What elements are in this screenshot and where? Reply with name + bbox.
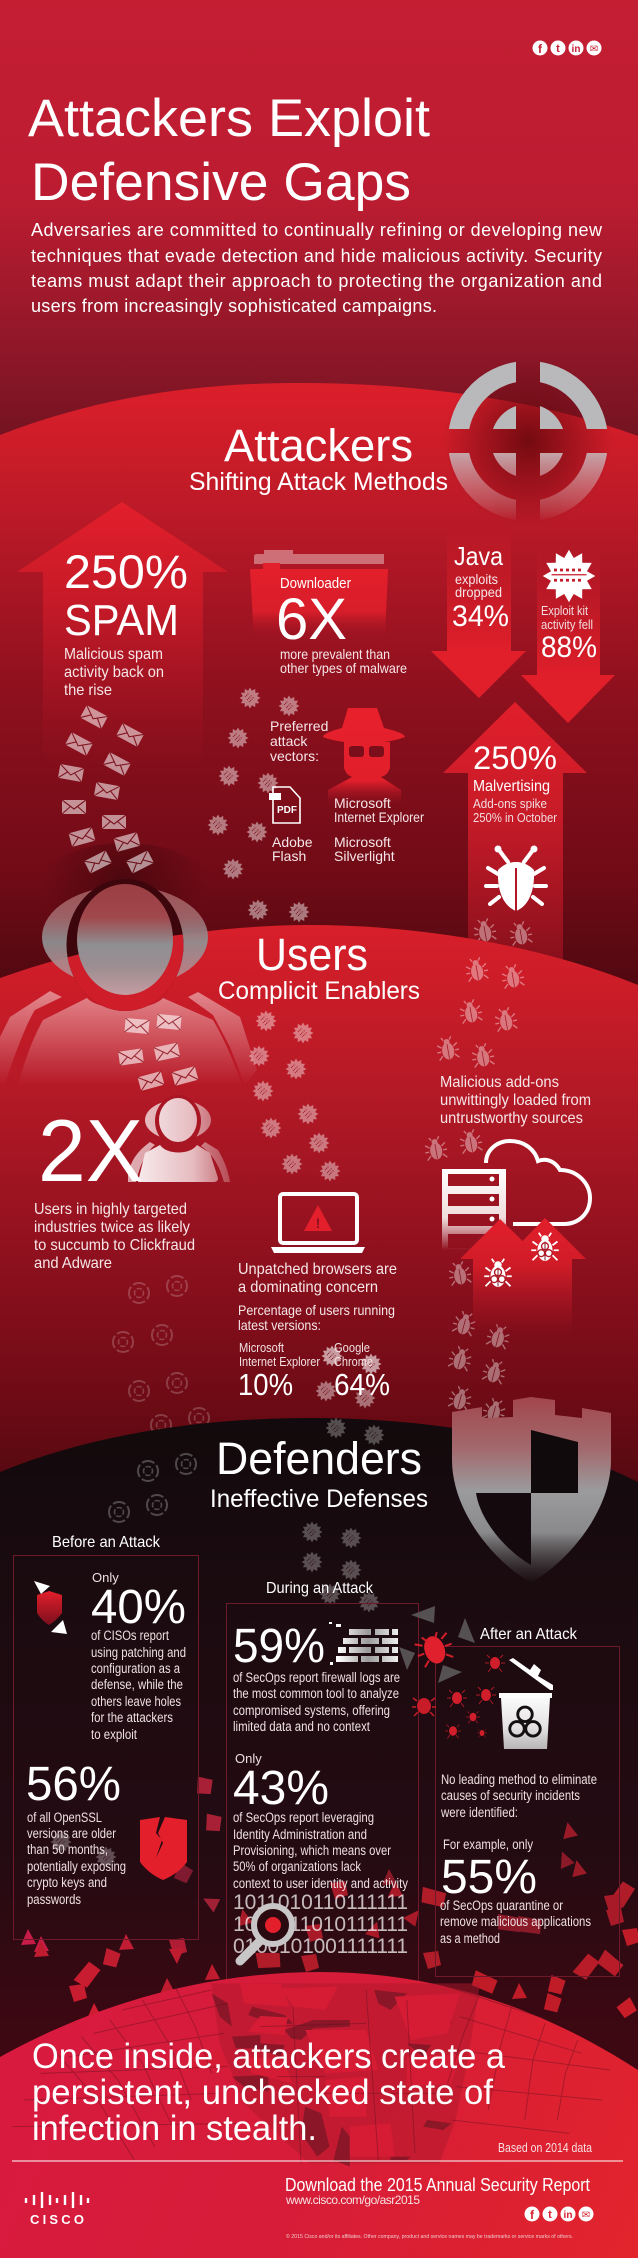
arrow: malvertising up <box>443 702 587 990</box>
stat: 40 percent: 40% <box>91 1581 186 1634</box>
intro paragraph: users from increasingly sophisticated campaigns. <box>31 296 437 316</box>
panel: after an attack <box>436 1626 620 1976</box>
spam stat: the rise <box>64 682 112 699</box>
title <box>28 89 430 212</box>
stat: 56 percent: versions are older <box>27 1826 116 1841</box>
java stat <box>452 541 509 633</box>
stat: 40 percent: using patching and <box>91 1645 186 1660</box>
download link <box>285 2175 590 2207</box>
stat: 59 percent: limited data and no context <box>233 1719 370 1734</box>
social icons top: f <box>538 42 543 56</box>
after attack text: causes of security incidents <box>441 1788 580 1803</box>
panel: bottom cracked dome <box>0 1972 638 2258</box>
vector names: Adobe <box>272 834 313 850</box>
stat: 43 percent: 50% of organizations lack <box>233 1859 361 1874</box>
exploit kit stat <box>541 603 597 664</box>
icon: spy <box>323 708 405 805</box>
icon: red bug with grey shards <box>399 1606 475 1716</box>
icon: cracked shield <box>140 1817 187 1880</box>
stat: 55 percent: as a method <box>440 1931 500 1946</box>
binary text: 1011010110111111 <box>233 1891 408 1914</box>
browsers text <box>238 1261 397 1402</box>
preferred attack vectors label: vectors: <box>270 748 319 764</box>
spam stat: SPAM <box>64 596 179 645</box>
stat: 43 percent: Provisioning, which means over <box>233 1843 391 1858</box>
java stat: exploits <box>455 571 498 587</box>
icon: large user silhouette <box>0 879 257 1085</box>
icon: magnifier <box>240 1906 292 1961</box>
stat: 43 percent: 43% <box>233 1762 329 1815</box>
icon: red shield with triangles <box>34 1581 67 1634</box>
arrows: add-ons up <box>460 1218 586 1335</box>
cisco logo <box>26 2192 88 2227</box>
stat: 43 percent: context to user identity and activity <box>233 1876 408 1891</box>
stat: 55 percent: remove malicious applications <box>440 1914 591 1929</box>
stat: 40 percent <box>91 1570 186 1742</box>
stat: 43 percent: Only <box>235 1751 262 1766</box>
icon: white bug <box>486 846 546 911</box>
stat: 56 percent: of all OpenSSL <box>27 1810 102 1825</box>
users text: Users in highly targeted <box>34 1201 187 1218</box>
panel: users dome <box>0 925 638 1490</box>
conclusion heading: persistent, unchecked state of <box>32 2073 493 2112</box>
stat: 40 percent: others leave holes <box>91 1694 181 1709</box>
icon: exploit kit virus <box>543 550 595 602</box>
users text: and Adware <box>34 1255 112 1272</box>
icon: broken firewall <box>329 1622 398 1665</box>
browsers text: Google <box>334 1341 370 1355</box>
users text: industries twice as likely <box>34 1219 190 1236</box>
social icons bottom: in <box>564 2210 572 2221</box>
browsers text: Percentage of users running <box>238 1302 395 1318</box>
downloader stat: other types of malware <box>280 660 407 676</box>
heading: attackers <box>189 420 448 496</box>
exploit kit stat: Exploit kit <box>541 603 588 618</box>
icon: server <box>442 1169 506 1250</box>
vector names: Silverlight <box>334 848 395 864</box>
java stat: dropped <box>455 584 502 600</box>
binary text: 1010111010111111 <box>233 1913 408 1936</box>
stat: 40 percent: of CISOs report <box>91 1628 169 1643</box>
malicious add-ons text: unwittingly loaded from <box>440 1092 591 1109</box>
cracked bricks <box>12 1983 610 2167</box>
stat: 40 percent: for the attackers <box>91 1710 173 1725</box>
intro paragraph: techniques that evade detection and hide malicious activity. Security <box>31 246 602 266</box>
browsers text: latest versions: <box>238 1317 321 1333</box>
java stat: 34% <box>452 600 509 633</box>
malicious add-ons text: untrustworthy sources <box>440 1110 583 1127</box>
social icons bottom: ✉ <box>582 2210 590 2221</box>
browsers text: Chrome <box>334 1355 373 1369</box>
small red bugs <box>445 1655 505 1738</box>
malicious add-ons text <box>440 1074 591 1127</box>
icon: crosshair target <box>449 362 607 520</box>
icon: laptop <box>271 1194 365 1253</box>
downloader stat <box>276 575 407 676</box>
heading: users: Users <box>256 929 368 980</box>
conclusion heading <box>32 2037 506 2148</box>
panel: after an attack: After an Attack <box>480 1626 578 1643</box>
icon: pdf file <box>269 787 300 823</box>
stat: 59 percent: 59% <box>233 1620 325 1673</box>
spam stat <box>64 545 188 699</box>
icon: laptop: ! <box>316 1215 320 1231</box>
virus trail upper <box>208 688 310 922</box>
binary text: 0100101001111111 <box>233 1935 408 1958</box>
intro paragraph: teams must adapt their approach to protecting the organization and <box>31 271 602 291</box>
social icons bottom: f <box>530 2208 535 2222</box>
preferred attack vectors label <box>270 718 328 764</box>
heading: users: Complicit Enablers <box>218 977 420 1005</box>
arrow: java down <box>431 525 526 698</box>
vector names: Internet Explorer <box>334 809 424 825</box>
social icons top <box>532 40 602 56</box>
icon: users pair <box>128 1095 230 1182</box>
intro paragraph: Adversaries are committed to continually refining or developing new <box>31 220 603 240</box>
icon: biohazard bugs <box>484 1233 559 1287</box>
social icons bottom <box>524 2206 594 2222</box>
browsers text: 10% <box>238 1367 293 1402</box>
heading: defenders: Ineffective Defenses <box>210 1485 428 1513</box>
virus trail middle <box>248 1010 382 1408</box>
vector names: Microsoft <box>334 795 391 811</box>
icon: cloud <box>486 1141 590 1224</box>
heading: defenders <box>210 1433 428 1513</box>
panel: defenders dome <box>0 1418 638 2100</box>
spam stat: Malicious spam <box>64 646 163 663</box>
virus trail behind browser stats <box>322 1346 382 1374</box>
browsers text: Unpatched browsers are <box>238 1261 397 1278</box>
social icons top: t <box>556 43 560 55</box>
browsers text: 64% <box>334 1367 390 1402</box>
exploit kit stat: 88% <box>541 631 597 664</box>
exploit kit stat: activity fell <box>541 617 593 632</box>
browsers text: a dominating concern <box>238 1279 378 1296</box>
target trail dark <box>109 1454 196 1522</box>
target trail <box>113 1276 209 1435</box>
stat: 40 percent: defense, while the <box>91 1677 183 1692</box>
panel: attackers dome <box>0 383 638 1010</box>
malvertising stat: Malvertising <box>473 778 550 795</box>
browsers text: Microsoft <box>239 1341 284 1355</box>
conclusion heading: Once inside, attackers create a <box>32 2037 506 2076</box>
bugs trail right <box>423 956 525 1424</box>
stat: 56 percent: than 50 months, <box>27 1842 108 1857</box>
malvertising stat: 250% <box>473 740 557 776</box>
binary text <box>233 1891 408 1958</box>
conclusion heading: infection in stealth. <box>32 2109 317 2148</box>
after attack text: For example, only <box>443 1837 533 1852</box>
bugs trail upper <box>472 917 533 946</box>
malvertising stat: Add-ons spike <box>473 796 547 811</box>
preferred attack vectors label: Preferred <box>270 718 328 734</box>
stat: 40 percent: configuration as a <box>91 1661 180 1676</box>
stat: 43 percent <box>233 1751 408 1891</box>
heading: users <box>218 929 420 1005</box>
copyright: © 2015 Cisco and/or its affiliates. Other company, product and service names may be trademarks or service marks of others. <box>286 2233 573 2240</box>
stat: 55 percent: of SecOps quarantine or <box>440 1898 563 1913</box>
preferred attack vectors label: attack <box>270 733 308 749</box>
dark glow behind user head <box>40 843 210 927</box>
spam stat: activity back on <box>64 664 164 681</box>
malicious add-ons text: Malicious add-ons <box>440 1074 559 1091</box>
stat: 40 percent: to exploit <box>91 1727 137 1742</box>
social icons top: ✉ <box>590 44 598 55</box>
downloader stat: Downloader <box>280 575 351 592</box>
after attack text: No leading method to eliminate <box>441 1772 597 1787</box>
icon: castle shield <box>452 1397 611 1583</box>
panel: during an attack: During an Attack <box>266 1580 374 1597</box>
stat: 56 percent: crypto keys and <box>27 1875 107 1890</box>
stat: 55 percent <box>440 1851 591 1946</box>
arrow: spam up <box>17 502 228 770</box>
stat: 55 percent: 55% <box>441 1851 537 1904</box>
arrow: exploit kit down <box>521 550 615 723</box>
data note: Based on 2014 data <box>498 2140 593 2155</box>
title: Defensive Gaps <box>31 153 411 212</box>
icon: folder <box>250 550 388 640</box>
vector names <box>272 795 424 864</box>
shards debris <box>21 1775 638 2019</box>
panel: before an attack <box>14 1534 198 1940</box>
users text <box>34 1201 195 1272</box>
java stat: Java <box>454 541 503 571</box>
users text: to succumb to Clickfraud <box>34 1237 195 1254</box>
icon: pdf file: PDF <box>277 805 297 816</box>
downloader stat: 6X <box>276 587 347 652</box>
virus trail dark <box>50 1418 384 1868</box>
stat: 43 percent: Identity Administration and <box>233 1827 367 1842</box>
stat: 56 percent: 56% <box>26 1758 121 1811</box>
heading: defenders: Defenders <box>216 1433 422 1484</box>
spam stat: 250% <box>64 545 188 598</box>
browsers text: Internet Explorer <box>239 1355 320 1369</box>
stat: 59 percent: of SecOps report firewall logs are <box>233 1670 400 1685</box>
icon: biohazard trash can <box>499 1658 553 1749</box>
stat: 43 percent: of SecOps report leveraging <box>233 1810 374 1825</box>
download link: Download the 2015 Annual Security Report <box>285 2175 590 2195</box>
stat: 56 percent <box>26 1758 126 1907</box>
stat: 56 percent: potentially exposing <box>27 1859 126 1874</box>
envelopes trail users <box>118 1014 198 1091</box>
malvertising stat: 250% in October <box>473 810 558 825</box>
social icons top: in <box>572 44 580 55</box>
cisco logo: CISCO <box>30 2212 84 2227</box>
title: Attackers Exploit <box>28 89 430 148</box>
downloader stat: more prevalent than <box>280 646 390 662</box>
panel: during an attack <box>226 1580 418 1982</box>
envelopes trail <box>58 705 154 874</box>
stat: 40 percent: Only <box>92 1570 119 1585</box>
2x stat: 2X <box>38 1101 143 1200</box>
heading: attackers: Shifting Attack Methods <box>189 468 448 496</box>
intro paragraph <box>31 220 603 316</box>
social icons bottom: t <box>548 2209 552 2221</box>
heading: attackers: Attackers <box>224 420 413 471</box>
stat: 56 percent: passwords <box>27 1892 81 1907</box>
stat: 59 percent <box>233 1620 400 1734</box>
download link: www.cisco.com/go/asr2015 <box>285 2193 420 2207</box>
vector names: Microsoft <box>334 834 391 850</box>
after attack text: were identified: <box>440 1805 518 1820</box>
stat: 59 percent: the most common tool to analyze <box>233 1686 399 1701</box>
stat: 59 percent: compromised systems, offering <box>233 1703 390 1718</box>
malvertising stat <box>473 740 558 825</box>
vector names: Flash <box>272 848 306 864</box>
after attack text <box>440 1772 597 1852</box>
panel: before an attack: Before an Attack <box>52 1534 161 1551</box>
